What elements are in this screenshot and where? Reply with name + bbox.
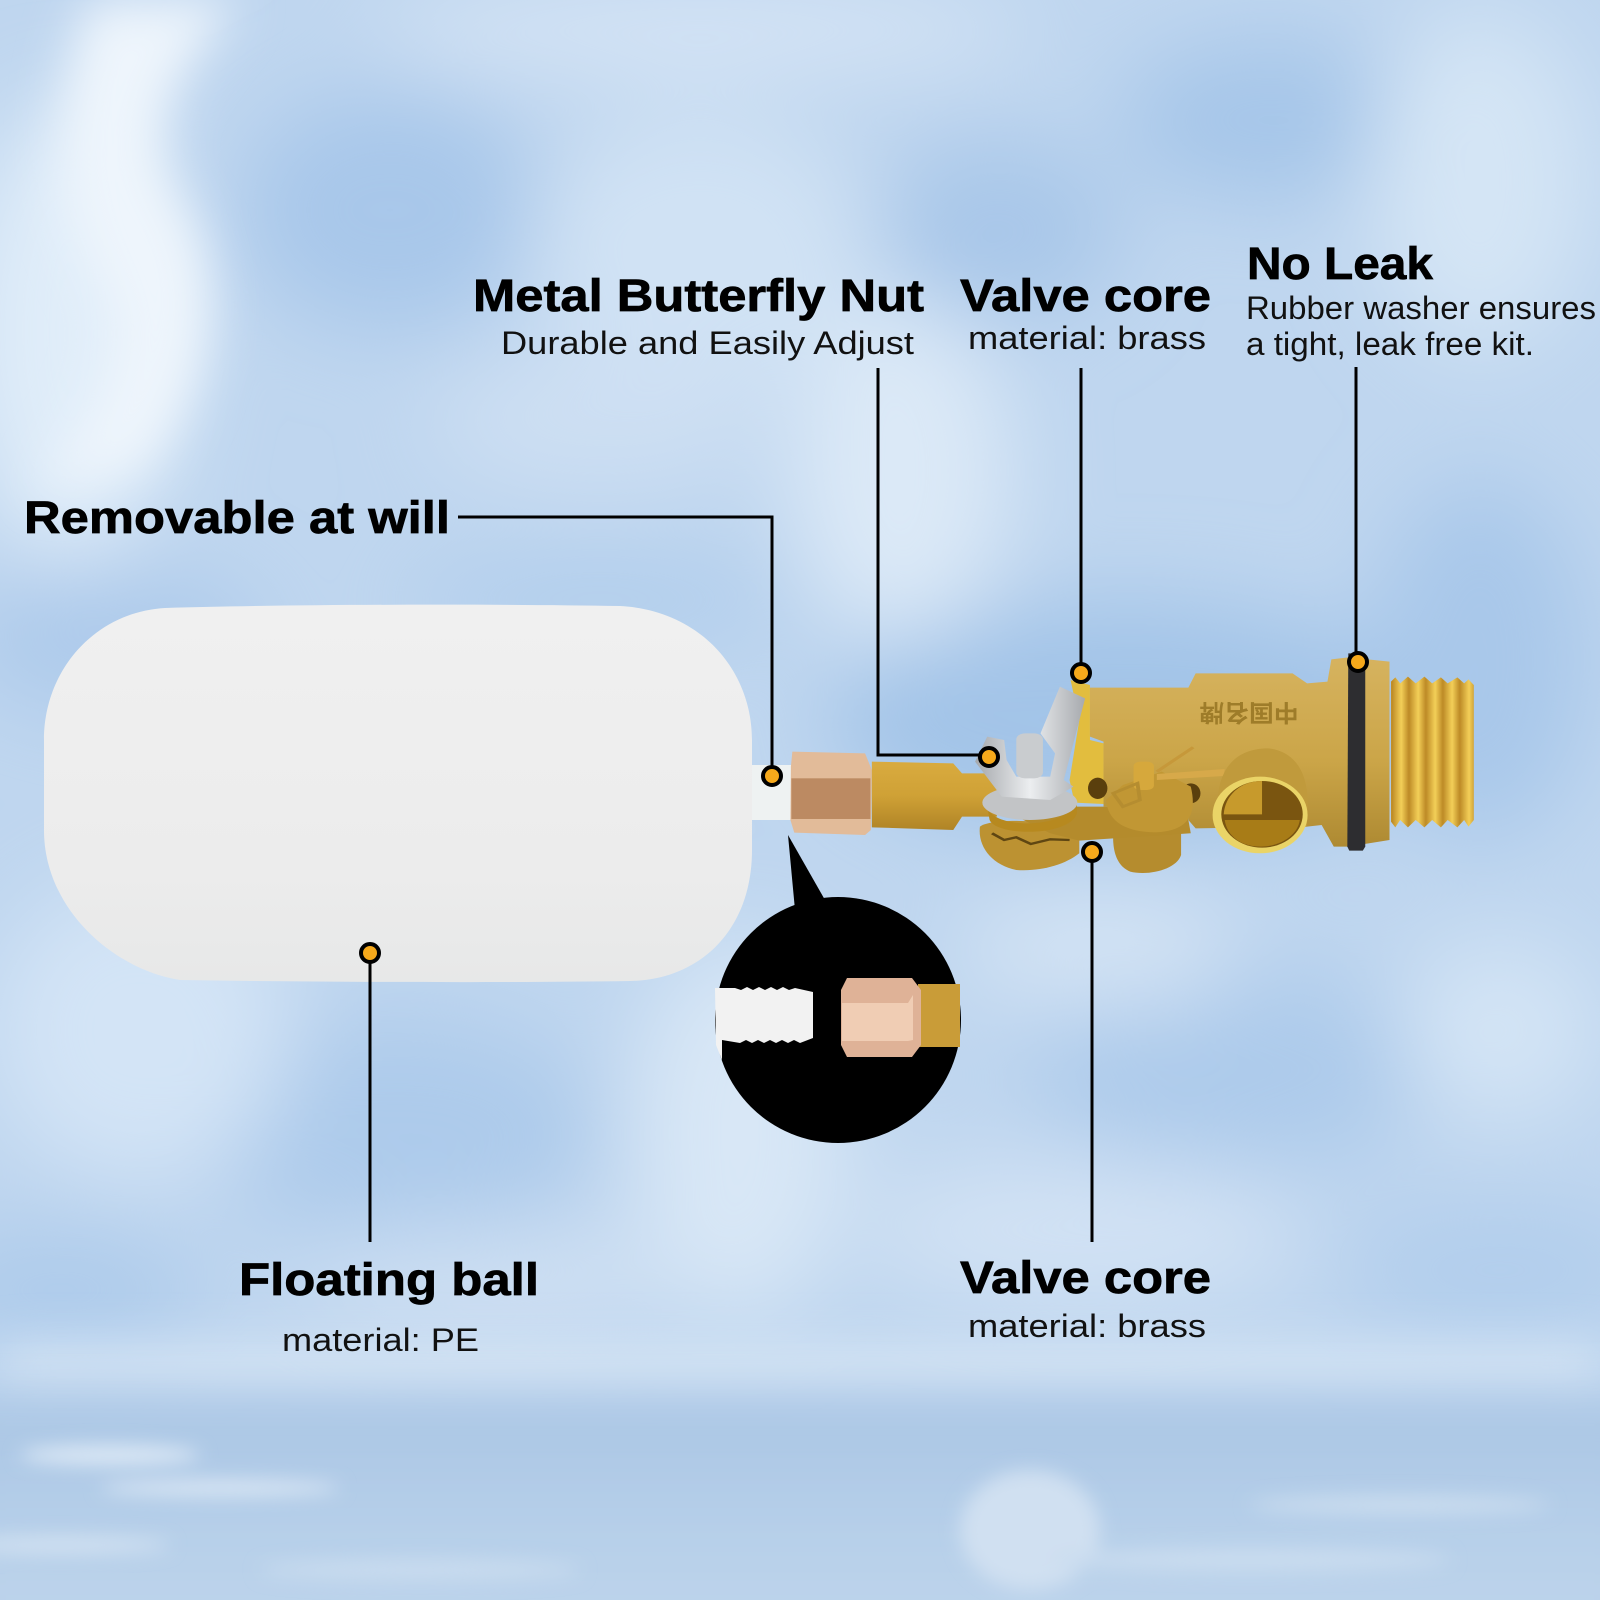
bright lever plate — [1070, 680, 1104, 804]
label: valve core top: material: brass — [968, 320, 1206, 356]
rubber washer — [1347, 653, 1365, 851]
label: metal butterfly nut: Metal Butterfly Nut — [473, 270, 924, 321]
callout: thread detail — [715, 835, 961, 1143]
label: no leak: Rubber washer ensures — [1246, 290, 1596, 326]
pin holes — [1088, 778, 1200, 803]
label: floating ball: Floating ball — [239, 1254, 539, 1305]
wing nut — [975, 687, 1085, 832]
floating ball — [44, 605, 795, 982]
copper hex nut — [790, 752, 872, 835]
label: floating ball: material: PE — [282, 1322, 479, 1358]
pointer — [788, 835, 825, 910]
magnifier circle — [715, 897, 961, 1143]
heading: removable at will: Removable at will — [24, 492, 450, 543]
label: valve core top: Valve core — [960, 270, 1211, 321]
threaded stem — [735, 765, 795, 820]
label: no leak: No Leak — [1247, 238, 1434, 289]
leader: removable at will — [458, 517, 781, 785]
lower body lobes — [980, 807, 1191, 873]
label: no leak — [1246, 238, 1596, 362]
brass pipe — [918, 984, 960, 1047]
brass pipe — [872, 762, 997, 830]
label: valve core top — [960, 270, 1211, 356]
leader: no leak — [1349, 367, 1367, 671]
label: floating ball — [239, 1254, 539, 1358]
valve assembly — [790, 653, 1474, 873]
cotter pin cap — [1106, 747, 1225, 832]
leader: metal butterfly nut — [878, 368, 998, 766]
leader: valve core top — [1072, 368, 1090, 682]
spring teeth — [992, 833, 1070, 844]
copper nut — [841, 978, 921, 1057]
embossed mark: 中国名牌 — [1199, 699, 1299, 725]
leader: floating ball — [361, 944, 379, 1242]
ball body — [44, 605, 752, 982]
white thread — [715, 987, 813, 1060]
label: metal butterfly nut: Durable and Easily Adjust — [501, 325, 914, 361]
label: valve core bottom: Valve core — [960, 1252, 1211, 1303]
main brass body — [1090, 657, 1389, 847]
label: no leak: a tight, leak free kit. — [1246, 326, 1534, 362]
leader: valve core bottom — [1083, 843, 1101, 1242]
male thread — [1391, 677, 1474, 827]
label: valve core bottom — [960, 1252, 1211, 1344]
label: valve core bottom: material: brass — [968, 1308, 1206, 1344]
label: metal butterfly nut — [473, 270, 924, 361]
outlet hole — [1213, 748, 1308, 853]
